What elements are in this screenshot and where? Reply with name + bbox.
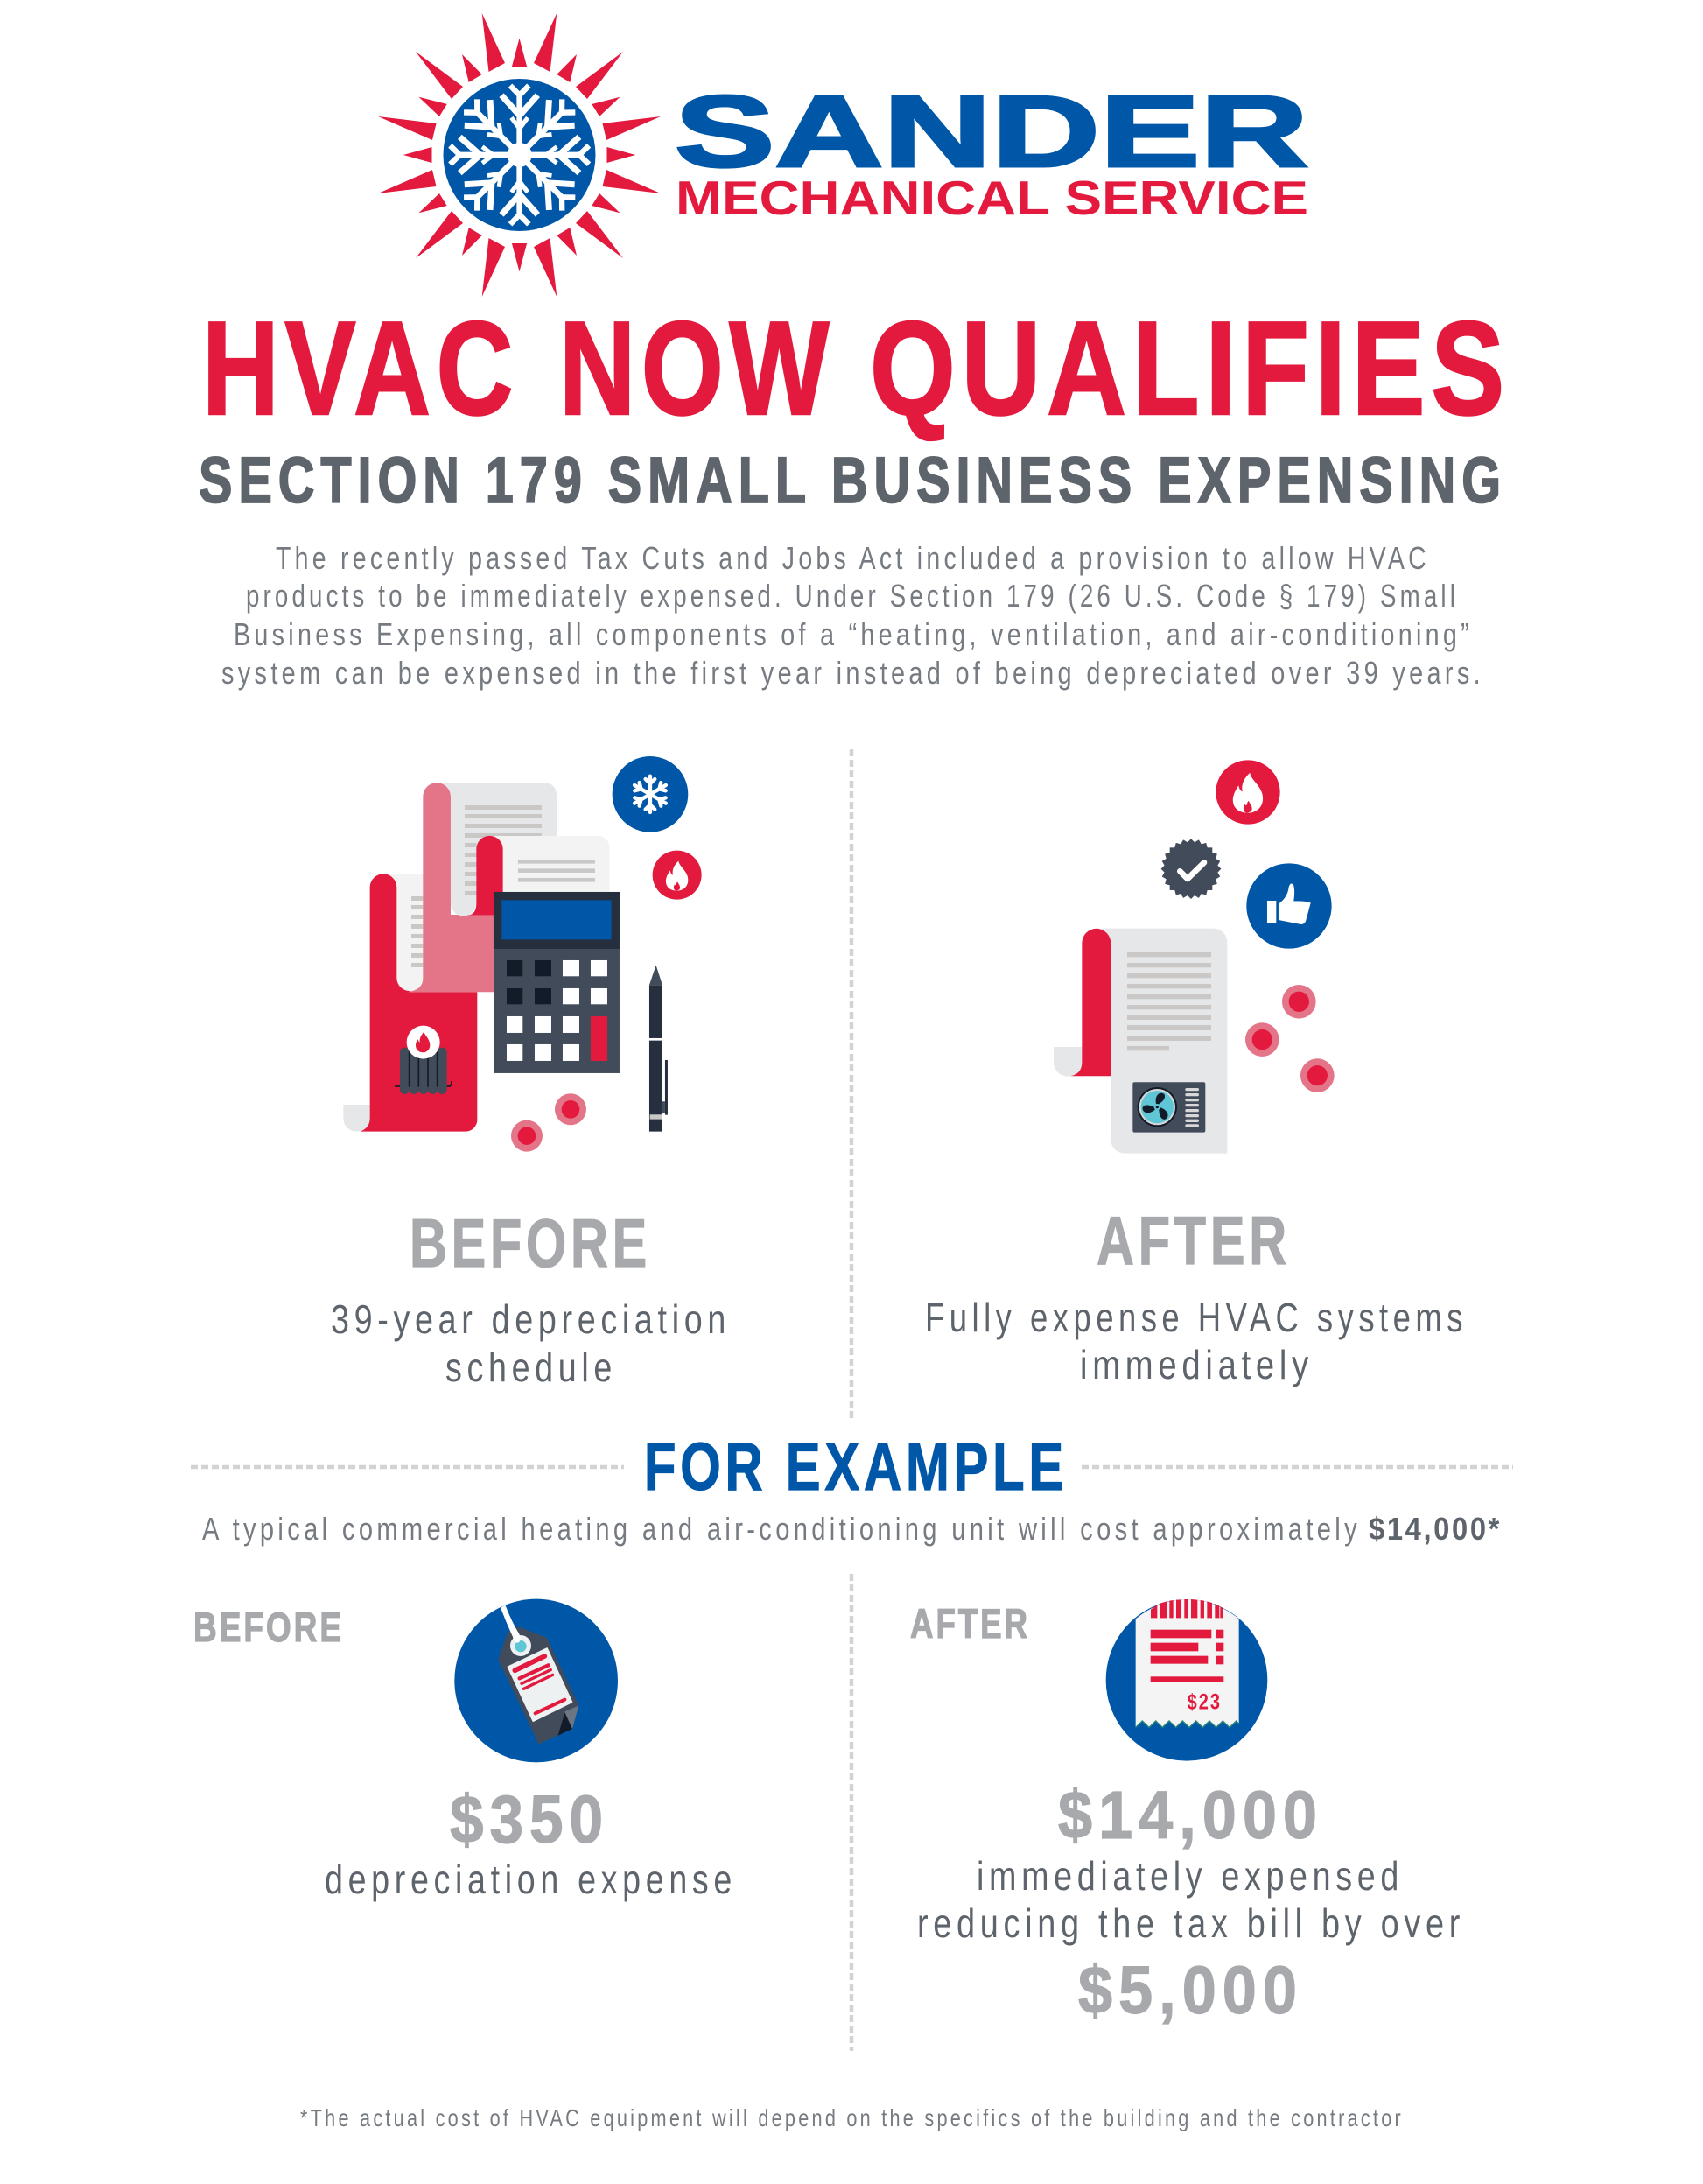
- intro paragraph: [221, 540, 1484, 691]
- icon: receipt: [1106, 1599, 1267, 1761]
- before label: BEFORE: [193, 1604, 344, 1650]
- before heading: BEFORE: [410, 1204, 651, 1282]
- title: [202, 294, 1510, 443]
- title: NOW: [559, 294, 835, 443]
- icon: flame badge: [653, 851, 702, 900]
- example description: A typical commercial heating and air-conditioning unit will cost approximately: [202, 1511, 1361, 1547]
- icon: check badge: [1161, 839, 1221, 899]
- decorative red dots: [511, 1093, 586, 1152]
- after amount caption: [917, 1853, 1465, 1946]
- before description: 39-year depreciation: [331, 1296, 731, 1342]
- before amount caption: depreciation expense: [325, 1857, 737, 1902]
- after amount caption: reducing the tax bill by over: [917, 1900, 1465, 1946]
- footnote: *The actual cost of HVAC equipment will depend on the specifics of the building and the contractor: [300, 2104, 1404, 2131]
- after description: immediately: [1080, 1342, 1314, 1387]
- logo wordmark: Mechanical Service: MECHANICAL SERVICE: [676, 171, 1308, 225]
- receipt amount: $23: [1188, 1690, 1222, 1714]
- logo: Sander Mechanical Service: [378, 13, 1308, 297]
- icon: flame badge: [1216, 760, 1280, 825]
- after amount: $14,000: [1058, 1778, 1323, 1853]
- after heading: AFTER: [1097, 1202, 1291, 1279]
- before description: [331, 1296, 731, 1390]
- icon: thumbs up badge: [1246, 863, 1332, 949]
- icon: price tag: [454, 1599, 618, 1762]
- title: HVAC: [202, 294, 519, 443]
- tax savings amount: $5,000: [1078, 1953, 1303, 2028]
- back document: [406, 783, 557, 992]
- after amount caption: immediately expensed: [977, 1853, 1404, 1899]
- decorative red dots: [1245, 985, 1335, 1092]
- icon: pen: [649, 966, 668, 1132]
- icon: radiator with flame: [395, 1026, 452, 1094]
- example description: $14,000*: [1369, 1511, 1502, 1547]
- after description: Fully expense HVAC systems: [925, 1295, 1468, 1340]
- middle document: [470, 836, 610, 915]
- before description: schedule: [445, 1345, 617, 1390]
- logo wordmark: SANDER: SANDER: [675, 74, 1308, 188]
- intro paragraph: The recently passed Tax Cuts and Jobs Act included a provision to allow HVAC: [276, 540, 1430, 576]
- title: QUALIFIES: [870, 294, 1510, 443]
- front document: [343, 874, 477, 1132]
- calculator: [494, 892, 620, 1073]
- icon: snowflake badge: [613, 756, 688, 832]
- document with fan unit: [1054, 929, 1227, 1154]
- after description: [925, 1295, 1468, 1387]
- after label: AFTER: [910, 1600, 1030, 1647]
- heading: for example: FOR EXAMPLE: [644, 1429, 1068, 1505]
- illustration: before, documents and calculator: [343, 756, 702, 1152]
- logo icon: sun with snowflake: [378, 13, 661, 297]
- before amount: $350: [450, 1782, 609, 1857]
- illustration: after, expensed document: [1054, 760, 1335, 1154]
